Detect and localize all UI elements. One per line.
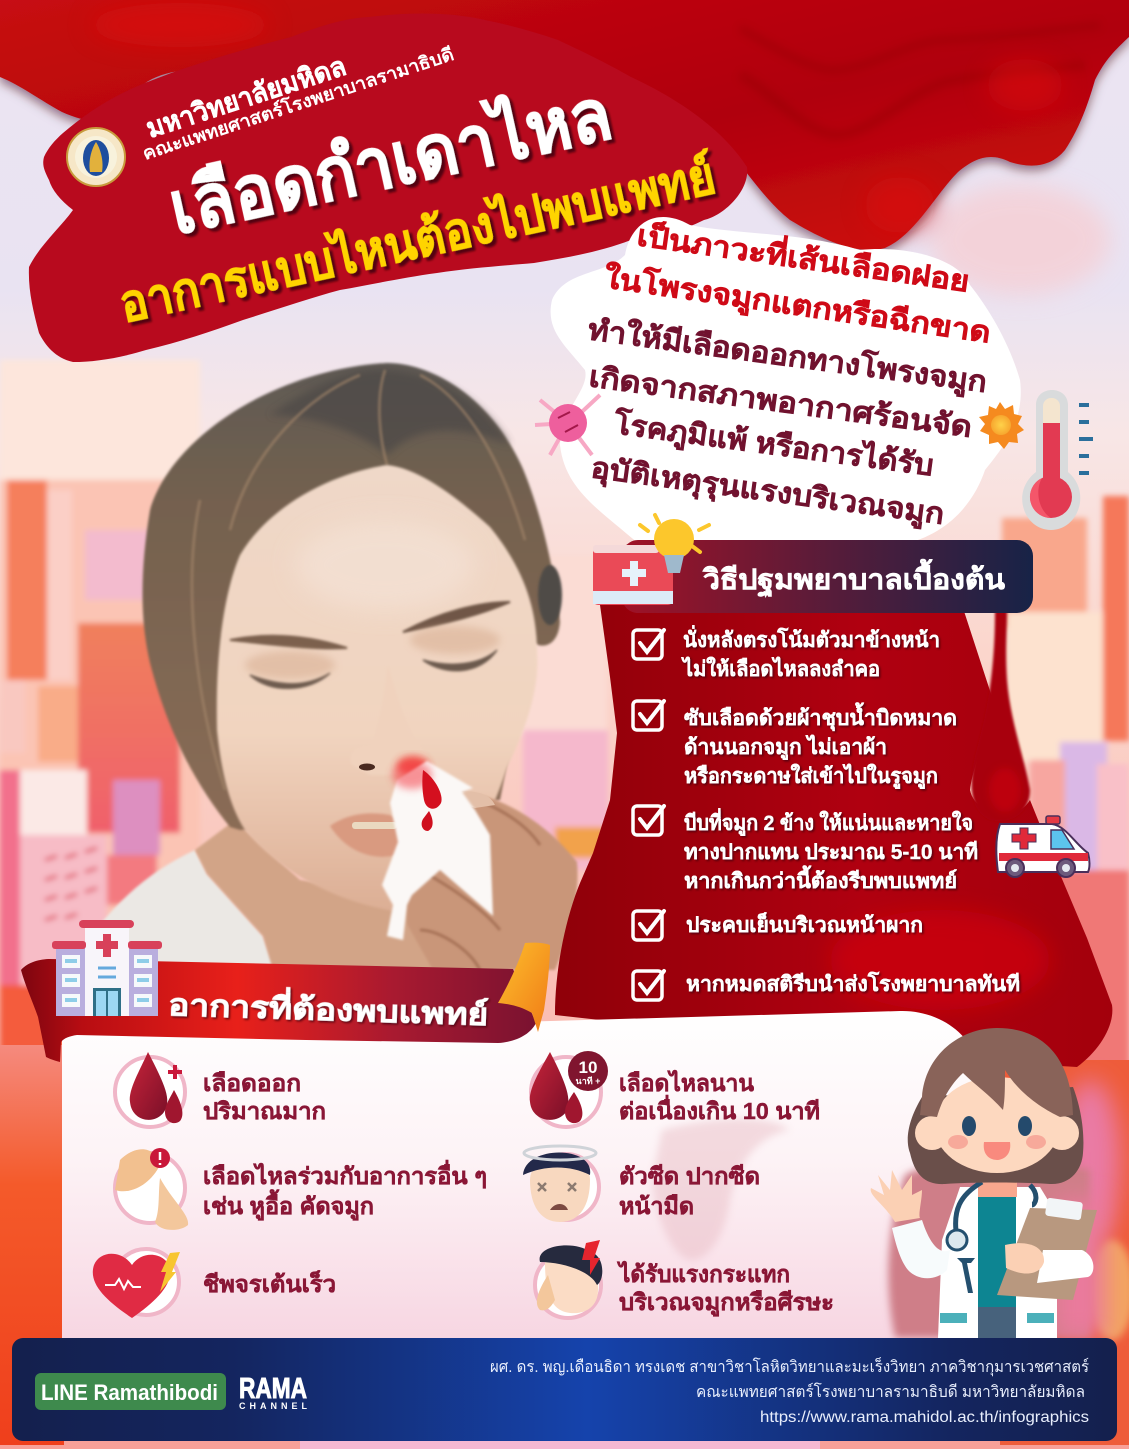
symptom 6 line 2: บริเวณจมูกหรือศีรษะ bbox=[619, 1289, 834, 1317]
main title: เลือดกำเดาไหล bbox=[161, 71, 619, 250]
hand bbox=[400, 792, 578, 970]
symptom 1 line 1: เลือดออก bbox=[203, 1070, 301, 1096]
symptoms heading ribbon bbox=[21, 943, 550, 1062]
bubble line 1: เป็นภาวะที่เส้นเลือดฝอย bbox=[635, 214, 972, 299]
step 5: หากหมดสติรีบนำส่งโรงพยาบาลทันที bbox=[686, 971, 1020, 996]
website: https://www.rama.mahidol.ac.th/infographics bbox=[760, 1409, 1089, 1426]
symptom 4 icon: drop with 10 min badge bbox=[530, 1051, 608, 1127]
lower right magenta edge bbox=[1055, 1200, 1105, 1338]
footer bar bbox=[12, 1338, 1117, 1441]
symptom 4 icon: drop with 10 min badge: 10 bbox=[579, 1058, 597, 1077]
portrait: woman holding tissue to nose bbox=[60, 363, 578, 985]
first aid heading banner bbox=[622, 540, 1033, 613]
step 2 line 2: ด้านนอกจมูก ไม่เอาผ้า bbox=[684, 734, 887, 761]
checkbox 5 bbox=[633, 971, 664, 1000]
panel bright sheen bbox=[830, 910, 1050, 1010]
left eye bbox=[250, 673, 330, 688]
title blob bbox=[29, 14, 747, 362]
symptom 2 line 1: เลือดไหลร่วมกับอาการอื่น ๆ bbox=[203, 1159, 487, 1189]
step 3 line 2: ทางปากแทน ประมาณ 5-10 นาที bbox=[684, 840, 978, 864]
nose bbox=[350, 665, 428, 775]
brown-pink shade behind doctor bbox=[888, 1159, 1090, 1338]
icon: thermometer bbox=[1022, 390, 1093, 530]
ribbon gold curl bbox=[498, 943, 550, 1032]
waving hand bbox=[871, 1170, 922, 1222]
symptom 3 text: ชีพจรเต้นเร็ว bbox=[203, 1269, 336, 1297]
logo: Mahidol seal bbox=[67, 128, 125, 186]
soft pink halo top right bbox=[930, 185, 1110, 295]
icon: hospital building bbox=[52, 920, 162, 1016]
icon: first aid kit with light bulb bbox=[593, 515, 709, 605]
symptom 6 line 1: ได้รับแรงกระแทก bbox=[616, 1260, 790, 1287]
holding hand bbox=[1005, 1243, 1044, 1274]
symptom 4 line 1: เลือดไหลนาน bbox=[619, 1069, 754, 1096]
sub title: อาการแบบไหนต้องไปพบแพทย์ bbox=[114, 147, 720, 333]
symptom 4 icon: drop with 10 min badge: นาที + bbox=[576, 1076, 600, 1086]
top blood drip bbox=[0, 0, 1129, 250]
right eye socket shading bbox=[410, 626, 500, 654]
coat bbox=[938, 1187, 1057, 1338]
face bbox=[934, 1077, 1060, 1173]
university name: มหาวิทยาลัยมหิดล bbox=[143, 51, 350, 144]
symptom 3 icon: heart bbox=[93, 1249, 180, 1318]
step 3 line 3: หากเกินกว่านี้ต้องรีบพบแพทย์ bbox=[684, 865, 957, 893]
fingertip bbox=[457, 792, 495, 808]
RAMA channel logo bbox=[239, 1373, 308, 1411]
teal top bbox=[978, 1197, 1016, 1307]
bubble line 4: เกิดจากสภาพอากาศร้อนจัด bbox=[587, 361, 974, 444]
icon: virus bbox=[535, 395, 600, 455]
lips bbox=[330, 813, 403, 857]
face bbox=[217, 465, 537, 912]
icon: sun bbox=[979, 402, 1024, 449]
waving arm bbox=[892, 1220, 950, 1278]
nose glow bbox=[397, 756, 429, 776]
faculty name: คณะแพทยศาสตร์โรงพยาบาลรามาธิบดี bbox=[140, 43, 456, 164]
symptom 1 line 2: ปริมาณมาก bbox=[203, 1098, 326, 1124]
mouth bbox=[984, 1142, 1010, 1160]
tissue bbox=[382, 761, 493, 940]
panel: first aid red shape bbox=[555, 605, 1112, 1067]
symptom 2 icon: ear and nose bbox=[115, 1148, 188, 1230]
symptom 5 line 2: หน้ามืด bbox=[619, 1193, 694, 1219]
first aid heading banner: วิธีปฐมพยาบาลเบื้องต้น bbox=[702, 558, 1005, 598]
right eyebrow bbox=[403, 602, 510, 632]
right sleeve bbox=[1037, 1250, 1093, 1283]
step 2 line 3: หรือกระดาษใส่เข้าไปในรูจมูก bbox=[684, 763, 938, 790]
hair bun bbox=[538, 565, 562, 625]
hair strands bbox=[192, 370, 525, 790]
right eye bbox=[423, 650, 497, 671]
symptom 5 icon: dizzy face bbox=[523, 1146, 599, 1222]
cheeks bbox=[948, 1135, 968, 1149]
symptom 6 icon: head impact bbox=[535, 1240, 602, 1318]
step 1 line 1: นั่งหลังตรงโน้มตัวมาข้างหน้า bbox=[683, 624, 940, 652]
tissue redness bbox=[392, 761, 432, 789]
panel: symptoms white area bbox=[62, 1011, 1105, 1338]
hair bbox=[142, 363, 560, 830]
checkbox 1 bbox=[633, 630, 664, 659]
symptom 5 line 1: ตัวซีด ปากซีด bbox=[619, 1163, 760, 1189]
stethoscope bbox=[956, 1182, 1036, 1238]
bubble line 2: ในโพรงจมูกแตกหรือฉีกขาด bbox=[602, 259, 993, 351]
blood drops on tissue bbox=[422, 770, 442, 809]
step 4: ประคบเย็นบริเวณหน้าผาก bbox=[686, 911, 923, 937]
neck bbox=[978, 1170, 1017, 1197]
faculty credit: คณะแพทยศาสตร์โรงพยาบาลรามาธิบดี มหาวิทยาลัยมหิดล bbox=[696, 1382, 1085, 1401]
eyes bbox=[962, 1116, 976, 1136]
bubble line 5: โรคภูมิแพ้ หรือการได้รับ bbox=[611, 405, 936, 484]
white shirt bbox=[60, 850, 275, 985]
symptom 1 icon: blood drop bbox=[115, 1052, 185, 1127]
lower left band bbox=[0, 1045, 64, 1445]
left eyebrow bbox=[230, 636, 347, 648]
doctor character bbox=[871, 1028, 1097, 1338]
step 1 line 2: ไม่ให้เลือดไหลลงลำคอ bbox=[681, 656, 880, 681]
checkbox 4 bbox=[633, 911, 664, 940]
definition bubble bbox=[551, 214, 1021, 545]
LINE Ramathibodi badge: LINE Ramathibodi bbox=[41, 1380, 218, 1405]
lower right colour bbox=[1000, 1060, 1129, 1445]
ribbon text: อาการที่ต้องพบแพทย์ bbox=[168, 983, 489, 1032]
hair top shading bbox=[270, 370, 510, 455]
forehead highlight bbox=[295, 520, 475, 610]
bubble line 6: อุบัติเหตุรุนแรงบริเวณจมูก bbox=[589, 452, 946, 532]
clipboard bbox=[997, 1208, 1097, 1300]
neck bbox=[195, 820, 445, 970]
hair top bbox=[920, 1028, 1073, 1117]
pale drip bbox=[652, 1119, 790, 1260]
first aid steps bbox=[633, 624, 1020, 1000]
symptom 2 line 2: เช่น หูอื้อ คัดจมูก bbox=[203, 1189, 374, 1221]
eye socket shading bbox=[245, 651, 335, 679]
RAMA channel logo: RAMA bbox=[239, 1373, 307, 1405]
author credit: ผศ. ดร. พญ.เดือนธิดา ทรงเดช สาขาวิชาโลหิตวิทยาและมะเร็งวิทยา ภาควิชากุมารเวชศาสตร์ bbox=[490, 1356, 1089, 1377]
RAMA channel logo: CHANNEL bbox=[239, 1401, 308, 1411]
icon: ambulance bbox=[996, 816, 1090, 877]
panel drip bbox=[972, 610, 1030, 821]
checkbox 3 bbox=[633, 806, 664, 835]
step 2 line 1: ซับเลือดด้วยผ้าชุบน้ำบิดหมาด bbox=[684, 702, 957, 732]
LINE Ramathibodi badge bbox=[35, 1373, 226, 1410]
checkbox 2 bbox=[633, 701, 664, 730]
step 3 line 1: บีบที่จมูก 2 ข้าง ให้แน่นและหายใจ bbox=[684, 807, 973, 837]
symptom 4 line 2: ต่อเนื่องเกิน 10 นาที bbox=[619, 1094, 820, 1124]
bubble line 3: ทำให้มีเลือดออกทางโพรงจมูก bbox=[586, 311, 989, 400]
back hair bbox=[908, 1087, 1083, 1184]
